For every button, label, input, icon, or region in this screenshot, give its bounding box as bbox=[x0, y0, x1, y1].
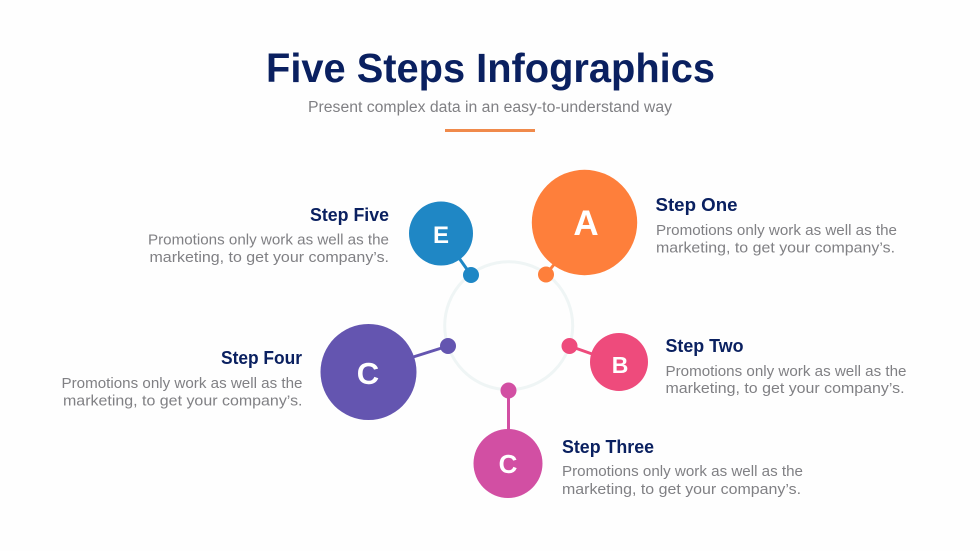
step two text: Step Two bbox=[666, 336, 744, 356]
step one text: Promotions only work as well as the bbox=[656, 223, 897, 239]
step two text bbox=[666, 336, 906, 397]
title accent underline bbox=[445, 129, 535, 132]
step one text: marketing, to get your company’s. bbox=[656, 240, 895, 256]
node A: step one: A bbox=[573, 204, 599, 243]
title: Five Steps Infographics bbox=[266, 45, 715, 91]
step four text bbox=[62, 348, 302, 410]
node B: step two: B bbox=[612, 352, 628, 378]
step four text: Step Four bbox=[221, 348, 302, 368]
step five text: marketing, to get your company’s. bbox=[150, 250, 389, 266]
node E: step five: E bbox=[433, 222, 449, 249]
node B: step two bbox=[562, 333, 648, 391]
node C: step three: C bbox=[499, 449, 518, 479]
node A: step one bbox=[532, 170, 637, 282]
step four text: Promotions only work as well as the bbox=[62, 376, 302, 392]
step two text: marketing, to get your company’s. bbox=[666, 381, 904, 397]
step three text bbox=[562, 437, 803, 498]
step one text bbox=[656, 195, 897, 256]
node C: step four: C bbox=[357, 356, 379, 391]
step three text: Step Three bbox=[562, 437, 654, 457]
step five text: Step Five bbox=[310, 205, 389, 225]
node C: step three bbox=[474, 382, 542, 498]
step three text: Promotions only work as well as the bbox=[562, 464, 803, 480]
step two text: Promotions only work as well as the bbox=[666, 364, 906, 380]
node C: step four bbox=[320, 324, 456, 420]
central ring bbox=[445, 262, 573, 390]
step three text: marketing, to get your company’s. bbox=[562, 482, 801, 498]
step four text: marketing, to get your company’s. bbox=[63, 394, 302, 410]
subtitle: Present complex data in an easy-to-understand way bbox=[308, 99, 672, 116]
node E: step five bbox=[409, 202, 479, 283]
step one text: Step One bbox=[656, 195, 738, 215]
step five text: Promotions only work as well as the bbox=[148, 232, 389, 248]
step five text bbox=[148, 205, 389, 266]
